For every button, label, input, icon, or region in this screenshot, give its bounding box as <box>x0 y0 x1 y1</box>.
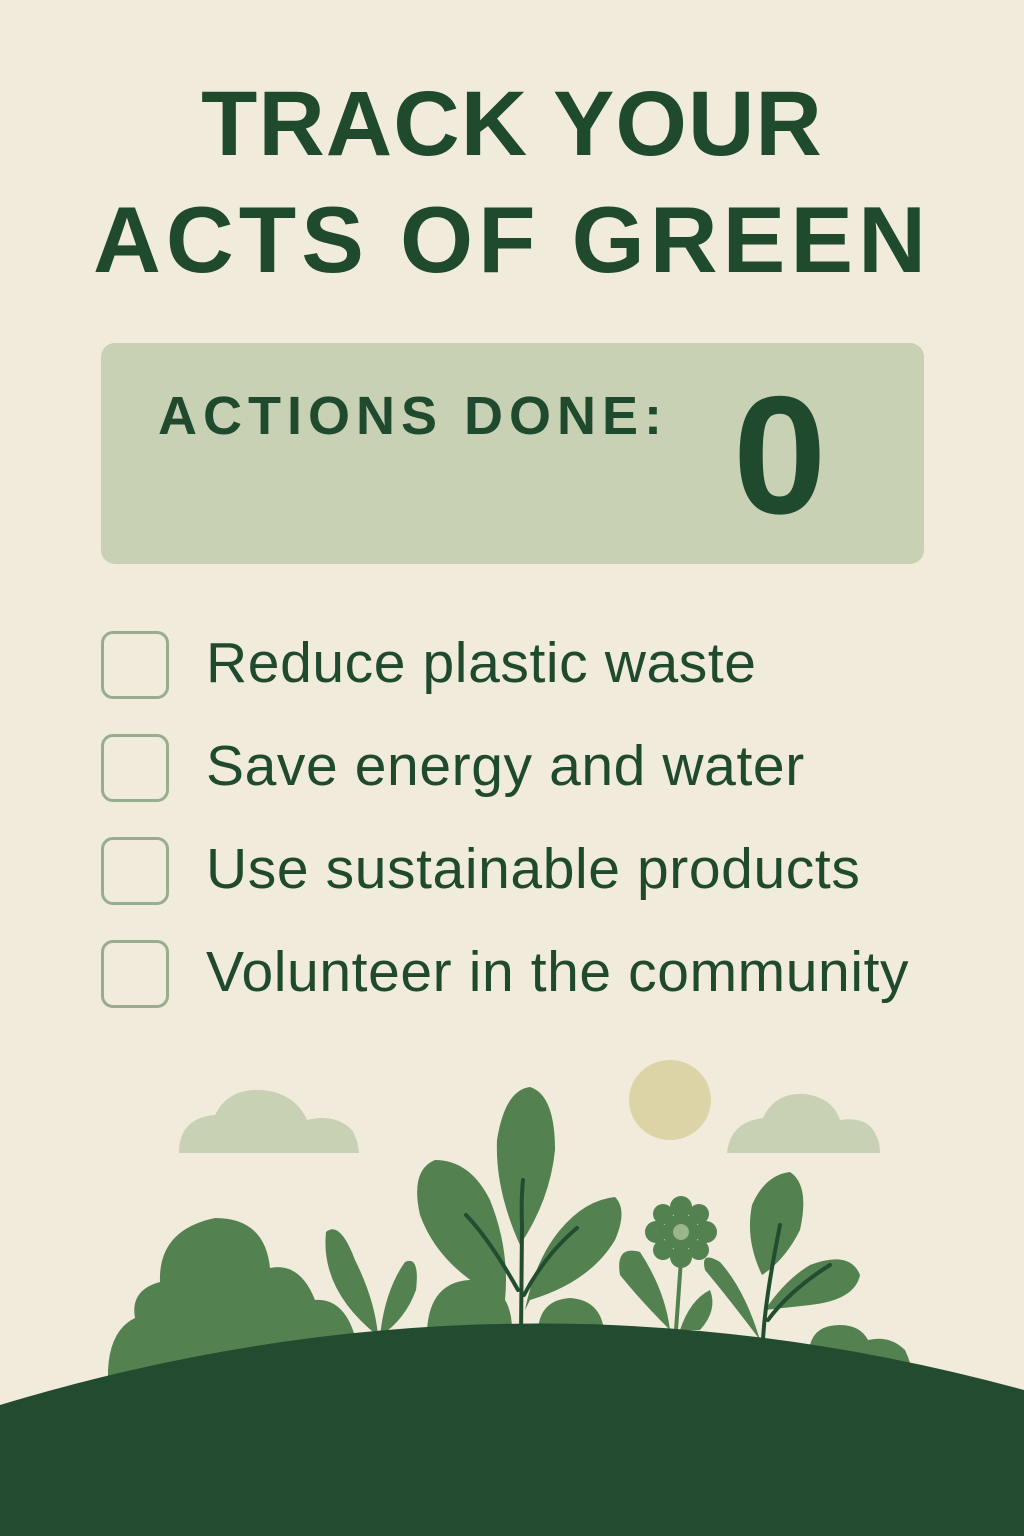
title: ACTS OF GREEN <box>93 187 931 292</box>
item 1: Reduce plastic waste <box>206 631 757 695</box>
item 3: Use sustainable products <box>206 837 860 901</box>
counter label: ACTIONS DONE: <box>158 386 668 446</box>
icon: cloud right <box>727 1094 880 1153</box>
panel: actions counter <box>101 343 924 564</box>
item 2: Save energy and water <box>206 734 805 798</box>
title <box>93 73 931 292</box>
plants <box>108 1087 914 1400</box>
checklist <box>101 631 909 1008</box>
hill <box>0 1324 1024 1536</box>
stems <box>466 1180 830 1340</box>
counter value: 0 <box>733 361 826 549</box>
title: TRACK YOUR <box>201 73 823 175</box>
icon: sun <box>629 1060 711 1140</box>
item 4: Volunteer in the community <box>206 940 909 1004</box>
icon: cloud left <box>179 1090 359 1153</box>
